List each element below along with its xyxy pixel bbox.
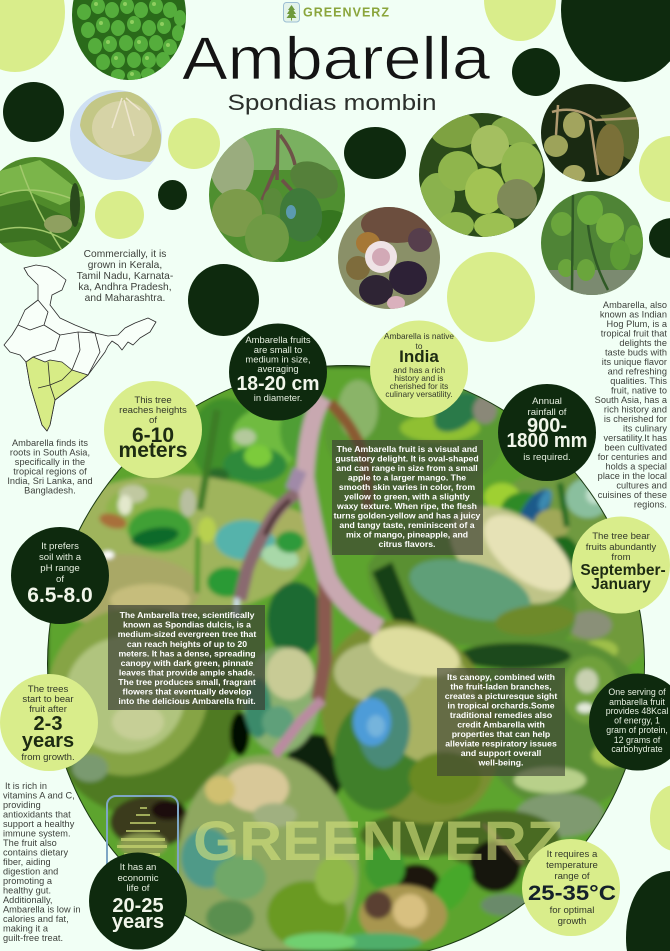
- text: nutrition benefits: healthy gut.: [3, 886, 51, 896]
- text panel: tree description: known as Spondias dulcis, is a: [123, 620, 251, 630]
- text panel: tree description: can reach heights of up to 20: [127, 639, 247, 649]
- bubble: fruit size: Ambarella fruits: [245, 334, 311, 345]
- text panel: fruit description: apple to a larger mango. The: [348, 472, 466, 482]
- bubble: nutrition per serving: ambarella fruit: [609, 697, 665, 707]
- text: commercial growing states: and Maharashtra.: [85, 293, 165, 304]
- bubble: fruiting season: September-: [580, 562, 666, 579]
- text: about ambarella: and refreshing: [608, 366, 667, 376]
- bubble: first fruit age: [0, 674, 98, 771]
- bubble: temperature: It requires a: [547, 849, 598, 860]
- text panel: tree description: leaves that provide ample shade.: [119, 668, 255, 678]
- text panel: fruit description: citrus flavors.: [379, 539, 435, 549]
- bubble: economic life: life of: [127, 883, 150, 894]
- bubble: tree height: This tree: [134, 395, 172, 406]
- text: about ambarella: its culinary: [623, 424, 667, 434]
- text: nutrition benefits: Additionally,: [3, 895, 53, 905]
- bubble: native to India: cherished for its: [390, 381, 448, 391]
- text panel: tree description: medium-sized evergreen tree that: [118, 629, 256, 639]
- text: about ambarella: qualities. This: [610, 376, 667, 386]
- text panel: canopy and remedies: well-being.: [478, 758, 523, 768]
- bubble: native to India: [370, 320, 468, 418]
- text panel: fruit description: The Ambarella fruit is a visual and: [337, 444, 477, 454]
- bubble: rainfall: rainfall of: [528, 407, 567, 418]
- bubble: soil pH: 6.5-8.0: [27, 584, 93, 607]
- text: about ambarella: holds a special: [605, 462, 667, 472]
- photo: green ambarella fruits pile: [70, 0, 190, 82]
- text: nutrition benefits: providing: [3, 800, 41, 810]
- bubble: rainfall: 900-: [527, 415, 567, 437]
- bubble: fruiting season: from: [611, 552, 631, 563]
- bubble: fruiting season: The tree bear: [592, 531, 651, 542]
- central fruit: [320, 616, 498, 826]
- bubble: rainfall: is required.: [523, 452, 571, 463]
- small middle fruit: [243, 647, 319, 753]
- bubble: first fruit age: The trees: [28, 684, 68, 695]
- bubble: tree height: of: [149, 415, 157, 426]
- text: about ambarella: tropical fruit that: [601, 328, 667, 338]
- bubble: nutrition per serving: gram of protein,: [606, 725, 668, 735]
- upper-right foliage: [327, 386, 500, 472]
- text panel: fruit description: yellow to green, with a slightly: [344, 492, 470, 502]
- bubble: tree height: meters: [119, 439, 187, 462]
- text: nutrition benefits: making it a: [3, 924, 49, 934]
- big right fruit: [368, 555, 577, 648]
- text: roots in South Asia: tropical regions of: [13, 466, 87, 476]
- bubble: tree height: 6-10: [132, 424, 174, 447]
- text: about ambarella: delights the: [619, 338, 667, 348]
- text: commercial growing states: Commercially, it is: [84, 249, 166, 260]
- bubble: fruit size: are small to: [254, 344, 302, 355]
- bubble: temperature: 25-35°C: [528, 882, 616, 905]
- bubble: nutrition per serving: of energy, 1: [614, 716, 660, 726]
- text panel: tree description: [108, 605, 265, 710]
- logo: [284, 2, 389, 22]
- bubble: native to India: to: [416, 341, 423, 351]
- bubble: temperature: growth: [558, 916, 586, 927]
- bubble: fruiting season: fruits abundantly: [586, 542, 656, 553]
- bubble: native to India: history and is: [395, 373, 443, 383]
- text: about ambarella: taste buds with: [605, 348, 667, 358]
- bubble: rainfall: 1800 mm: [506, 430, 588, 452]
- bubble: soil pH: of: [56, 574, 64, 585]
- logo: GREENVERZ: [303, 6, 389, 20]
- text: about ambarella: regions.: [634, 500, 667, 510]
- text panel: canopy and remedies: and support overall: [461, 748, 541, 758]
- bubble: soil pH: soil with a: [39, 552, 82, 563]
- text: nutrition benefits: immune system.: [3, 828, 71, 838]
- text: nutrition benefits: It is rich in: [5, 781, 47, 791]
- text panel: canopy and remedies: properties that can help: [452, 729, 550, 739]
- bubble: rainfall: [498, 384, 596, 481]
- bubble: first fruit age: from growth.: [21, 752, 75, 763]
- map of India: [4, 265, 156, 431]
- bubble: fruit size: [229, 324, 327, 420]
- text: roots in South Asia: specifically in the: [15, 457, 85, 467]
- text: nutrition benefits: The fruit also: [3, 838, 57, 848]
- bubble: soil pH: It prefers: [41, 541, 79, 552]
- text panel: fruit description: and can range in size from a small: [336, 463, 478, 473]
- bubble: economic life: It has an: [120, 862, 156, 873]
- text: commercial growing states: Tamil Nadu, Karnata-: [77, 271, 173, 282]
- text panel: fruit description: gustatory delight. It is oval-shaped: [335, 454, 479, 464]
- lower fruit: [178, 755, 358, 951]
- text panel: fruit description: waxy texture. When ripe, the flesh: [336, 501, 477, 511]
- text panel: fruit description: and tangy taste, reminiscent of a: [339, 520, 475, 530]
- photo: green fruits: [419, 113, 545, 237]
- text: roots in South Asia: Bangladesh.: [24, 486, 76, 496]
- text panel: tree description: meters. It has a dense, spreading: [118, 648, 256, 658]
- text: nutrition benefits: contains dietary: [3, 848, 69, 858]
- olive fruit at bottom: [359, 885, 447, 945]
- text: nutrition benefits: digestion and: [3, 866, 58, 876]
- bubble: native to India: and has a rich: [393, 365, 445, 375]
- text: roots in South Asia: India, Sri Lanka, and: [7, 476, 93, 486]
- bubble: fruit size: averaging: [257, 363, 299, 374]
- bubble: fruit size: in diameter.: [254, 392, 302, 403]
- photo: mangosteen: [338, 207, 440, 309]
- bubble: economic life: years: [112, 911, 164, 933]
- text: nutrition benefits: guilt-free treat.: [3, 933, 63, 943]
- text: about ambarella: cultures and: [616, 480, 667, 490]
- upper-left foliage: [192, 398, 249, 481]
- photo: fruits on tree: [541, 191, 643, 295]
- bubble: fruiting season: [572, 516, 670, 614]
- bubble: nutrition per serving: One serving of: [608, 687, 666, 697]
- bubble: tree height: reaches heights: [119, 405, 187, 416]
- text panel: tree description: The tree produces small, fragrant: [118, 677, 256, 687]
- text panel: tree description: flowers that eventually develop: [123, 686, 251, 696]
- photo: cut fruit: [68, 88, 164, 182]
- text panel: canopy and remedies: alleviate respiratory issues: [445, 738, 557, 748]
- text: nutrition benefits: Ambarella is low in: [3, 904, 81, 914]
- bubble: temperature: [522, 839, 620, 936]
- text: roots in South Asia: Ambarella finds its: [12, 438, 88, 448]
- title: Ambarella: [182, 25, 491, 92]
- text panel: canopy and remedies: creates a picturesque sight: [445, 691, 557, 701]
- photo: ambarella cluster: [209, 128, 345, 262]
- text panel: canopy and remedies: the fruit-laden branches,: [450, 682, 552, 692]
- text: about ambarella: for centuries and: [598, 452, 667, 462]
- text: about ambarella: Hog Plum, is a: [607, 319, 668, 329]
- dark below left fruit: [110, 796, 190, 848]
- watermark: GREENVERZ: [193, 809, 563, 872]
- main circle photo: fruits on branch: [23, 366, 650, 951]
- text panel: fruit description: [332, 440, 483, 555]
- text: roots in South Asia: roots in South Asia,: [10, 448, 90, 458]
- bubble: nutrition per serving: [589, 674, 670, 770]
- bubble: temperature: temperature: [546, 860, 598, 871]
- text: about ambarella: is cherished for: [604, 414, 667, 424]
- bubble: first fruit age: 2-3: [34, 713, 62, 735]
- photo: leaves: [0, 157, 85, 257]
- bubble: fruiting season: January: [591, 576, 651, 593]
- bubble: fruit size: medium in size,: [245, 354, 311, 364]
- text panel: canopy and remedies: Its canopy, combined with: [447, 672, 555, 682]
- text: about ambarella: place in the local: [598, 471, 667, 481]
- text: about ambarella: Ambarella, also: [603, 300, 667, 310]
- text: nutrition benefits: vitamins A and C,: [3, 790, 75, 800]
- text: about ambarella: cuisines of these: [598, 490, 667, 500]
- text: about ambarella: been cultivated: [604, 442, 667, 452]
- bubble: soil pH: [11, 527, 109, 624]
- bubble: nutrition per serving: provides 48Kcal: [606, 706, 668, 716]
- bubble: tree height: [104, 381, 202, 478]
- bubble: first fruit age: years: [22, 730, 74, 752]
- text: about ambarella: South Asia, has a: [595, 395, 668, 405]
- bubble: rainfall: Annual: [532, 396, 562, 407]
- text: about ambarella: known as Indian: [600, 310, 667, 320]
- lower right foliage: [497, 640, 633, 803]
- text: commercial growing states: ka, Andhra Pradesh,: [78, 282, 172, 293]
- text panel: fruit description: mix of mango, pineapple, and: [346, 530, 468, 540]
- bubble: economic life: 20-25: [112, 895, 164, 917]
- bubble: first fruit age: start to bear: [22, 694, 74, 705]
- watermark: [107, 796, 563, 906]
- text: about ambarella: versatility.It has: [603, 433, 667, 443]
- bubble: soil pH: pH range: [40, 563, 80, 574]
- text: nutrition benefits: support a healthy: [3, 819, 75, 829]
- text panel: canopy and remedies: traditional remedies also: [450, 710, 552, 720]
- bubble: nutrition per serving: 12 grams of: [614, 735, 661, 745]
- bubble: nutrition per serving: carbohydrate: [611, 744, 663, 754]
- subtitle: Spondias mombin: [228, 90, 436, 115]
- text: nutrition benefits: calories and fat,: [3, 914, 69, 924]
- text panel: tree description: The Ambarella tree, scientifically: [120, 610, 255, 620]
- bubble: economic life: [89, 852, 187, 950]
- text panel: canopy and remedies: in tropical orchards.Some: [447, 700, 555, 710]
- text: about ambarella: rich history and: [604, 404, 667, 414]
- text: about ambarella: fruit, native to: [611, 386, 667, 396]
- bubble: economic life: economic: [117, 873, 159, 884]
- branches: [330, 403, 368, 510]
- bubble: fruit size: 18-20 cm: [236, 373, 320, 395]
- bubble: native to India: India: [399, 347, 439, 366]
- text panel: fruit description: smooth skin varies in color, from: [339, 482, 475, 492]
- left fruit: [66, 608, 242, 812]
- bubble: first fruit age: fruit after: [29, 704, 68, 715]
- bubble: temperature: range of: [554, 871, 590, 882]
- photo: branch with fruits: [541, 84, 639, 182]
- text panel: fruit description: turns golden-yellow and has a juicy: [334, 510, 481, 520]
- text: about ambarella: its unique flavor: [602, 357, 667, 367]
- text panel: tree description: canopy with dark green, pinnate: [121, 658, 254, 668]
- text panel: canopy and remedies: credit Ambarella with: [457, 720, 545, 730]
- bubble: temperature: for optimal: [550, 905, 594, 916]
- text: nutrition benefits: antioxidants that: [3, 810, 71, 820]
- bubble: native to India: culinary versatility.: [385, 389, 453, 399]
- bubble: native to India: Ambarella is native: [384, 331, 454, 341]
- dark gaps: [230, 712, 250, 756]
- text: nutrition benefits: promoting a: [3, 876, 53, 886]
- text: nutrition benefits: fiber, aiding: [3, 857, 51, 867]
- text panel: tree description: into the delicious Ambarella fruit.: [118, 696, 256, 706]
- text panel: canopy and remedies: [437, 668, 565, 776]
- text: commercial growing states: grown in Kerala,: [88, 260, 162, 271]
